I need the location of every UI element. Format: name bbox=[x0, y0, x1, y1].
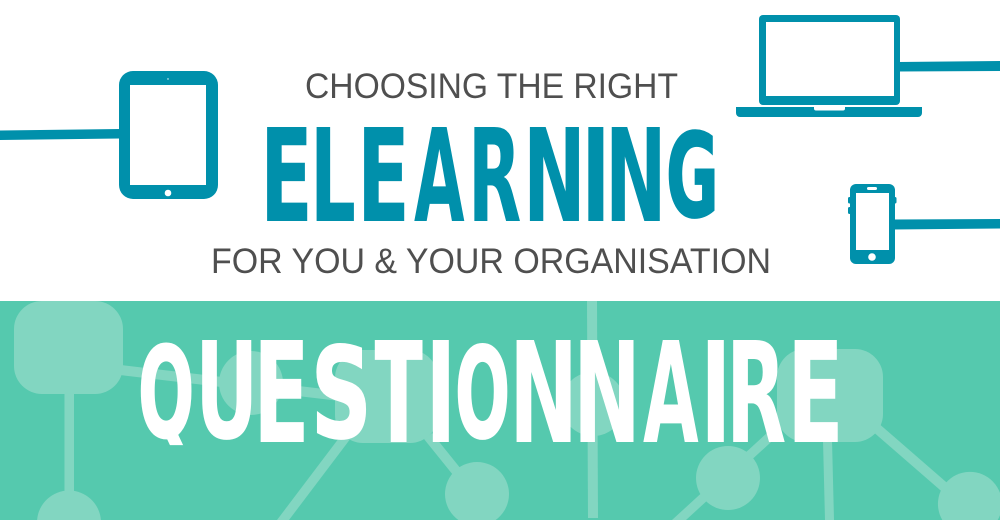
network node: rounded square top left bbox=[14, 301, 123, 394]
title: elearning: R bbox=[468, 102, 521, 252]
title: elearning: G bbox=[666, 109, 718, 244]
icon: smartphone with cable bbox=[848, 184, 1000, 264]
icon: tablet with cable bbox=[0, 71, 218, 199]
title: elearning: N bbox=[523, 102, 586, 252]
title: elearning: E bbox=[260, 102, 313, 252]
network node: rounded square right bbox=[777, 349, 883, 442]
title: questionnaire: R bbox=[726, 313, 786, 476]
heading line: for you and your organisation: FOR YOU & YOUR ORGANISATION bbox=[211, 242, 771, 281]
title: questionnaire: I bbox=[425, 313, 457, 476]
title: questionnaire: N bbox=[572, 313, 640, 476]
title: elearning: I bbox=[581, 102, 610, 252]
title: questionnaire: E bbox=[787, 313, 844, 476]
title: elearning bbox=[260, 102, 718, 252]
network connectors bbox=[64, 301, 953, 520]
title: questionnaire: U bbox=[195, 314, 259, 471]
title: questionnaire: S bbox=[310, 321, 371, 468]
panel: white header bbox=[0, 0, 1000, 301]
title: questionnaire: E bbox=[253, 313, 310, 476]
title: questionnaire: I bbox=[700, 313, 732, 476]
heading line: choosing the right: CHOOSING THE RIGHT bbox=[305, 67, 678, 106]
panel: teal band bbox=[0, 301, 1000, 520]
title: elearning: A bbox=[414, 102, 464, 252]
title: questionnaire: Q bbox=[138, 321, 195, 468]
title: questionnaire: N bbox=[509, 313, 579, 476]
title: questionnaire: T bbox=[370, 313, 427, 476]
title: elearning: N bbox=[605, 102, 667, 252]
title: questionnaire: A bbox=[643, 313, 698, 476]
title: questionnaire bbox=[140, 313, 844, 476]
icon: laptop with cable bbox=[736, 15, 1000, 117]
title: elearning: E bbox=[357, 102, 410, 252]
title: questionnaire: O bbox=[455, 321, 510, 468]
network node: rounded square centre bbox=[335, 350, 438, 443]
network node: circles bbox=[37, 351, 1000, 520]
title: elearning: L bbox=[310, 102, 356, 252]
network pattern bbox=[14, 301, 1000, 520]
